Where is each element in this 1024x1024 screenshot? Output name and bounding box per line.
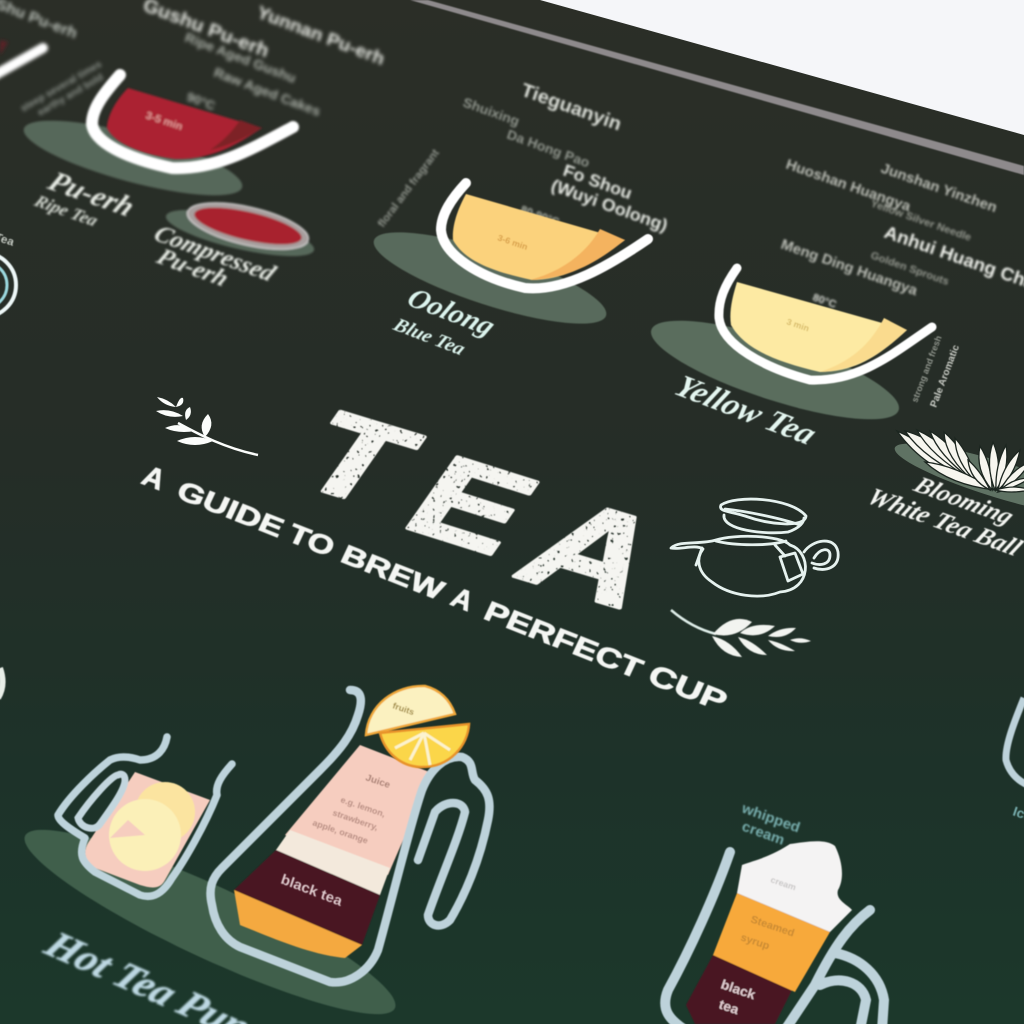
wall behind poster [540,0,1024,135]
punch mug [58,737,232,896]
Pu-erh variety labels: Yunnan Pu-erh [255,1,387,69]
sweetened layer [713,893,830,992]
Yellow tea variety labels: Meng Ding Huangya [779,237,920,300]
Yellow tea side note: Pale Aromatic [929,343,962,409]
Yellow tea variety labels: 80°C [811,292,838,311]
blooming name: Blooming [908,472,1019,529]
panel: blooming white tea [862,430,1024,561]
lemon slices: fruits [391,701,416,717]
Pu-erh variety labels: Raw Aged Cakes [212,65,323,119]
Oolong name [389,283,501,360]
Yellow tea side note [910,334,962,409]
Yellow tea variety labels [779,157,1024,311]
panel: Pu-erh tea [18,0,387,292]
tea bag [775,545,803,581]
layer text: cream [769,875,798,892]
icon: right leaf sprig [671,610,811,657]
Pu-erh variety labels: 90°C [185,89,217,113]
black tea layer [686,955,792,1024]
layer text: syrup [739,932,771,953]
compressed Pu-erh name: Compressed [149,221,281,287]
black tea text: black [719,977,758,1002]
pitcher lemon juice band [276,830,390,895]
Oolong variety labels: 80-90°C [519,204,561,229]
title: TEA: A [493,472,694,634]
title: TEA: T [274,390,441,530]
punch pitcher: Juice [364,773,392,791]
Oolong name: Blue Tea [389,314,469,360]
punch saucer [10,803,410,1024]
Pu-erh variety labels: Ripe Aged Gushu [183,30,298,86]
Yellow tea cup: 3 min [785,317,811,333]
top-left partial cup [0,0,79,75]
Yellow tea name: Yellow Tea [668,370,823,452]
Pu-erh tea cup [92,75,293,168]
Oolong variety labels: Da Hong Pao [505,127,591,170]
teapot body [671,536,838,596]
left edge partial cup [0,231,16,698]
teapot lid [721,499,806,533]
mug outline [665,852,884,1024]
compressed Pu-erh name: Pu-erh [151,244,233,292]
icon: teapot with tea bag [671,499,838,596]
Pu-erh side note: earthy and bold [36,72,105,119]
panel: black tea with whipped cream [665,801,884,1024]
subtitle: CUP [643,660,732,718]
subtitle: A [137,460,170,497]
whipped cream label: whipped [739,801,802,836]
panel: hot tea punch [10,686,489,1024]
punch pitcher: strawberry, [331,808,379,832]
subtitle: A [446,582,478,617]
Oolong variety labels: Fo Shou [561,160,635,203]
blooming name: White Tea Ball [862,483,1024,561]
whipped cream [737,841,852,932]
lemon slices [366,686,469,767]
title: TEA [274,390,694,634]
punch pitcher: e.g. lemon, [339,795,387,819]
subtitle: GUIDE [172,475,288,543]
Oolong variety labels: (Wuyi Oolong) [549,175,670,235]
Oolong variety labels: Tieguanyin [518,79,624,135]
Yellow tea saucer [642,301,908,439]
Oolong tea cup: 3-6 min [496,233,529,252]
subtitle: BREW [336,539,449,606]
panel: Yellow tea [642,157,1024,452]
subtitle: PERFECT [479,596,648,684]
Oolong variety labels: Shuixing [461,95,521,129]
pitcher juice layer [285,745,432,875]
Pu-erh variety labels [140,0,387,119]
compressed Pu-erh cake [162,194,318,266]
punch pitcher: apple, orange [311,818,369,846]
whipped cream label: cream [740,819,786,849]
blooming flower [897,430,1024,492]
icon: left leaf sprig [156,397,258,455]
Oolong variety labels [461,79,670,235]
punch pitcher [210,690,489,982]
Oolong name: Oolong [401,283,501,342]
layer text: Steamed [749,914,796,939]
pitcher black tea layer [234,850,380,945]
right edge partial mug [1006,698,1024,827]
blooming saucer [890,431,1024,529]
Oolong side note: floral and fragrant [376,147,442,230]
Pu-erh tea cup: 3-5 min [144,110,184,133]
black tea text [717,977,758,1017]
Yellow tea variety labels: Yellow Silver Needle [869,198,973,244]
Yellow tea variety labels: Junshan Yinzhen [879,161,999,216]
pitcher black tea label: black tea [279,872,345,910]
panel: Oolong tea [366,79,670,360]
Yellow tea cup [719,268,932,380]
Pu-erh side note: steep several times [19,59,104,115]
title: TEA: E [383,432,561,578]
subtitle: TO [283,518,339,562]
Oolong saucer [366,215,614,341]
layer text [739,875,798,953]
Yellow tea side note: strong and fresh [910,334,944,404]
black tea text: tea [717,997,741,1017]
Pu-erh name: Pu-erh [42,166,140,223]
pitcher sweetener layer [234,890,362,958]
subtitle [137,460,732,718]
Oolong tea cup [441,183,648,288]
Yellow tea variety labels: Huoshan Huangya [784,157,913,215]
poster top rule [410,0,1024,175]
Pu-erh saucer [18,106,248,210]
Pu-erh name: Ripe Tea [30,191,102,230]
Yellow tea variety labels: Golden Sprouts [869,250,950,288]
